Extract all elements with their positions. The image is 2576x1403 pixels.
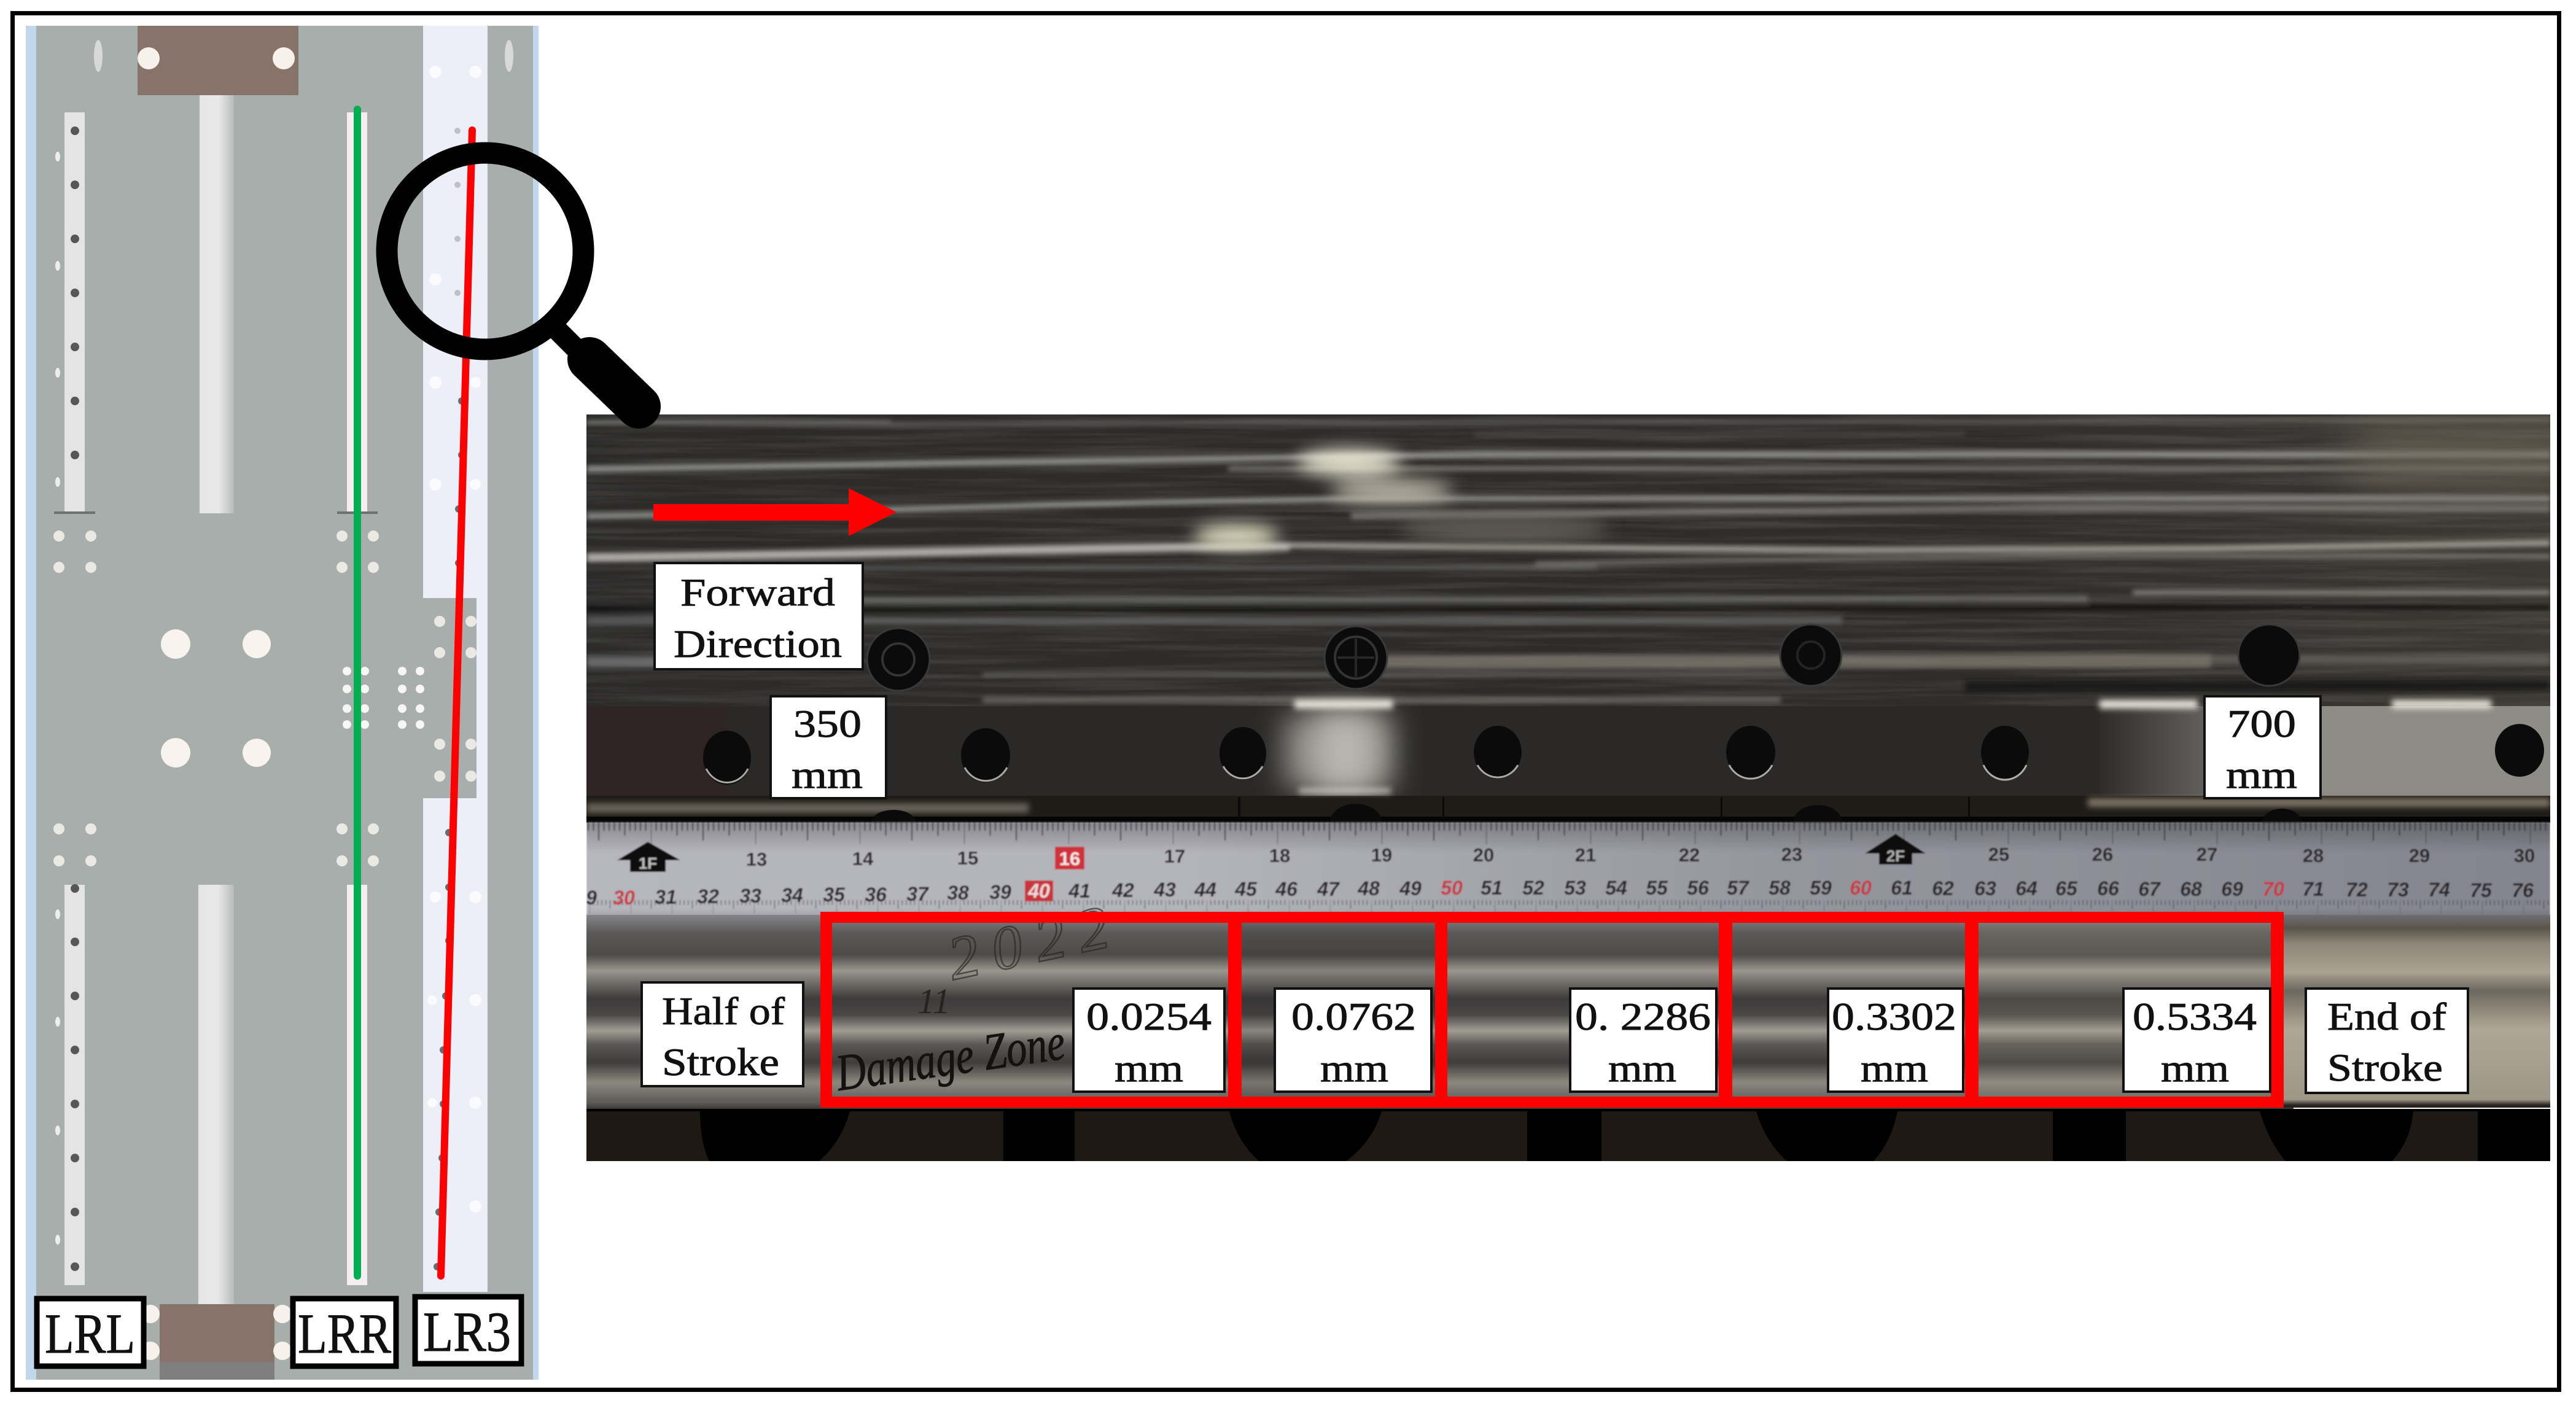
ruler upper scale numbers: 13 — [746, 849, 767, 870]
ruler lower scale numbers: 56 — [1687, 877, 1709, 899]
ruler lower scale numbers: 33 — [739, 885, 761, 907]
ruler upper scale numbers: 20 — [1473, 844, 1494, 866]
handwriting: Damage Zone: Damage Zone — [832, 1014, 1068, 1102]
ruler lower scale numbers: 47 — [1317, 878, 1341, 900]
ruler lower scale numbers: 68 — [2180, 878, 2202, 900]
rail LR3 lavender strip — [423, 26, 488, 1292]
label: 350 mm: mm — [792, 753, 863, 796]
label: 0.5334 mm: mm — [2161, 1046, 2229, 1090]
right rail LRR lower — [347, 885, 367, 1285]
LR3 strip holes — [427, 66, 481, 1213]
label: 0.0254 mm — [1073, 989, 1224, 1092]
icon: magnifying glass — [387, 153, 639, 406]
ruler lower scale numbers: 69 — [2221, 878, 2243, 900]
rail notches — [871, 797, 2302, 841]
green line: LRR rail — [354, 109, 361, 1276]
ruler lower scale numbers: 65 — [2055, 877, 2078, 900]
ruler lower scale numbers: 46 — [1275, 878, 1298, 900]
ruler marker 2F — [1865, 834, 1926, 865]
center guide bar upper — [200, 95, 234, 513]
label: End of Stroke: Stroke — [2327, 1046, 2443, 1089]
bottom carriage block — [141, 1304, 292, 1380]
label: LR3: LR3 — [423, 1300, 511, 1363]
ruler marker 2F: 2F — [1886, 847, 1905, 865]
ruler lower scale numbers: 58 — [1769, 877, 1791, 899]
label: 350 mm — [771, 696, 886, 798]
ruler upper scale numbers — [746, 844, 2535, 870]
dark base with arches — [586, 1109, 2550, 1161]
ruler lower scale numbers: 9 — [586, 887, 597, 909]
ruler upper scale numbers: 18 — [1269, 845, 1290, 866]
panel: photograph of damaged rail with ruler — [586, 414, 2573, 1161]
center-right hole clusters — [343, 667, 424, 729]
label: Half of Stroke: Stroke — [662, 1040, 779, 1084]
ruler lower scale numbers: 61 — [1891, 877, 1913, 899]
label: 0.0762 mm — [1275, 989, 1431, 1092]
label: Forward Direction — [655, 563, 863, 669]
label: 700 mm: 700 — [2227, 702, 2296, 745]
ruler lower scale numbers: 67 — [2138, 878, 2162, 900]
ruler upper scale numbers: 26 — [2092, 844, 2113, 865]
ruler lower scale numbers — [586, 877, 2534, 909]
top carriage block — [138, 26, 298, 95]
ruler upper scale numbers: 29 — [2409, 845, 2430, 866]
ruler red box 16: 16 — [1059, 848, 1080, 869]
ruler lower scale numbers: 59 — [1810, 877, 1832, 899]
ruler lower scale numbers: 44 — [1194, 879, 1216, 901]
ruler lower scale numbers: 75 — [2470, 879, 2492, 901]
ruler upper scale numbers: 19 — [1371, 844, 1392, 866]
label: End of Stroke — [2306, 989, 2468, 1093]
label: LRL: LRL — [45, 1302, 135, 1365]
ruler lower scale numbers: 51 — [1481, 877, 1503, 899]
ruler lower scale numbers: 42 — [1111, 879, 1134, 901]
rail surface streaks — [586, 420, 2550, 700]
LR3 mounting holes — [434, 616, 477, 782]
label: 0.3302 mm — [1828, 989, 1963, 1092]
upper bolt sockets — [882, 637, 1824, 678]
ruler upper scale numbers: 21 — [1575, 844, 1596, 866]
ruler lower scale numbers: 55 — [1646, 877, 1668, 899]
ruler lower scale numbers: 43 — [1153, 879, 1176, 901]
specular highlights on rail — [1193, 449, 1609, 547]
ruler lower scale numbers: 63 — [1974, 877, 1996, 900]
label: End of Stroke: End of — [2327, 995, 2447, 1038]
label: 700 mm: mm — [2226, 753, 2297, 796]
label: 0.2286 mm: mm — [1608, 1046, 1676, 1090]
label: 700 mm — [2204, 696, 2321, 798]
ruler upper scale numbers: 15 — [957, 847, 978, 869]
ruler lower scale numbers: 39 — [989, 881, 1011, 903]
ruler marker 1F: 1F — [639, 854, 657, 873]
ruler lower scale numbers: 53 — [1564, 877, 1586, 899]
ruler lower scale numbers: 49 — [1399, 877, 1422, 900]
handwriting: date: 2022 — [941, 893, 1115, 993]
label: Half of Stroke — [642, 982, 803, 1086]
label: 350 mm: 350 — [793, 702, 862, 745]
ruler upper scale numbers: 14 — [852, 848, 874, 869]
label: 0.0762 mm: mm — [1320, 1046, 1388, 1090]
LR3 rail bolts — [434, 128, 465, 1270]
ruler lower scale numbers: 76 — [2512, 879, 2534, 901]
ruler lower scale numbers: 50 — [1441, 877, 1463, 899]
ruler lower scale numbers: 37 — [906, 883, 930, 905]
label: 0.2286 mm: 0. 2286 — [1575, 995, 1711, 1038]
bright rail edge highlights — [1294, 700, 2491, 793]
ruler lower scale numbers: 54 — [1605, 877, 1627, 899]
left rail LRL upper — [54, 112, 95, 514]
ruler upper scale numbers: 17 — [1164, 845, 1185, 867]
handwriting: tick marks: 11 — [917, 981, 951, 1021]
ruler upper scale numbers: 27 — [2197, 844, 2217, 865]
lower mounting holes — [53, 823, 379, 866]
upper rail bolts — [867, 624, 2300, 691]
ruler lower scale numbers: 60 — [1850, 877, 1872, 899]
measuring tape ruler — [586, 822, 2550, 923]
rail strip below ruler — [586, 915, 2550, 1114]
ruler lower scale numbers: 52 — [1522, 877, 1544, 899]
ruler lower scale numbers: 34 — [781, 884, 803, 906]
label: 0.2286 mm — [1570, 989, 1716, 1092]
ruler lower scale numbers: 74 — [2428, 879, 2450, 901]
ruler lower scale numbers: 32 — [697, 885, 719, 907]
label: 0.5334 mm: 0.5334 — [2133, 995, 2257, 1038]
ruler lower scale numbers: 38 — [947, 882, 969, 904]
label: Half of Stroke: Half of — [662, 989, 785, 1033]
ruler lower scale numbers: 36 — [865, 884, 887, 906]
label: 0.5334 mm — [2123, 989, 2270, 1092]
ruler lower scale numbers: 70 — [2262, 878, 2284, 900]
ruler lower scale numbers: 72 — [2346, 879, 2368, 901]
ruler lower scale numbers: 41 — [1068, 880, 1091, 902]
right rail LRR upper — [337, 112, 378, 514]
left rail LRL lower — [55, 884, 85, 1285]
red line: LR3 rail — [441, 130, 472, 1276]
mounting holes upper — [53, 530, 379, 573]
label: Forward Direction: Direction — [674, 622, 842, 666]
lower rail bolts — [703, 724, 2544, 785]
label: 0.0254 mm: mm — [1115, 1046, 1183, 1090]
ruler red box 16 — [1055, 847, 1084, 869]
ruler lower scale numbers: 73 — [2387, 879, 2409, 901]
upper rail surface — [586, 414, 2550, 709]
label: 0.0254 mm: 0.0254 — [1086, 995, 1212, 1038]
red frame: damage zone segments — [820, 912, 2284, 1108]
ruler upper scale numbers: 23 — [1781, 844, 1802, 865]
label: Forward Direction: Forward — [680, 570, 835, 614]
small top markers — [94, 40, 513, 72]
label: LRR: LRR — [298, 1302, 392, 1365]
panel background — [26, 26, 539, 1380]
panel: top-view CAD diagram of linear rails — [26, 26, 539, 1380]
ruler lower scale numbers: 57 — [1727, 877, 1750, 899]
ruler lower scale numbers: 35 — [823, 884, 846, 906]
red arrow: forward direction — [653, 488, 897, 536]
ruler lower scale numbers: 45 — [1234, 878, 1258, 900]
label: 0.3302 mm: mm — [1861, 1046, 1928, 1090]
ruler lower scale numbers: 64 — [2015, 877, 2037, 900]
label: 0.0762 mm: 0.0762 — [1291, 995, 1416, 1038]
ruler lower scale numbers: 30 — [613, 887, 635, 909]
ruler marker 1F — [617, 842, 680, 873]
ruler red box 40: 40 — [1027, 880, 1050, 902]
ruler upper scale numbers: 30 — [2514, 845, 2535, 866]
ruler upper scale numbers: 22 — [1679, 844, 1700, 866]
lower guide rail face — [586, 706, 2550, 823]
worn top-right rail patch — [2352, 424, 2573, 485]
ruler lower scale numbers: 62 — [1932, 877, 1954, 900]
label: 0.3302 mm: 0.3302 — [1832, 995, 1956, 1038]
ruler lower scale numbers: 71 — [2302, 878, 2324, 900]
ruler upper scale numbers: 28 — [2303, 845, 2324, 866]
ruler lower scale numbers: 66 — [2097, 877, 2119, 900]
ruler upper scale numbers: 25 — [1988, 844, 2009, 865]
ruler lower scale numbers: 48 — [1357, 877, 1380, 900]
large center holes — [161, 629, 271, 768]
center guide bar lower — [198, 885, 234, 1304]
ruler lower scale numbers: 31 — [655, 886, 677, 908]
